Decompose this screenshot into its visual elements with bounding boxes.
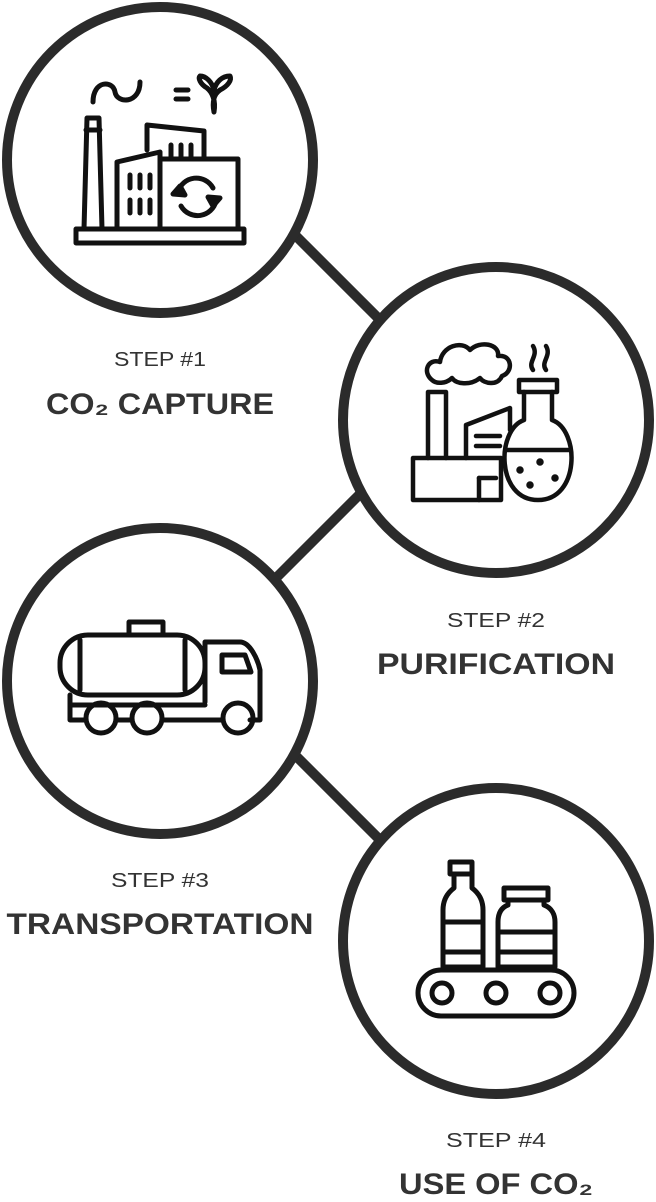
icon: purification bbox=[413, 344, 572, 500]
icon: factory capture bbox=[76, 76, 244, 243]
step 4 label: USE OF CO₂ bbox=[399, 1168, 593, 1201]
step 3 label: TRANSPORTATION bbox=[6, 908, 314, 941]
circle 1 bbox=[7, 7, 313, 313]
step 3 label bbox=[6, 870, 314, 941]
step 1 label: STEP #1 bbox=[114, 349, 206, 371]
circle 4 bbox=[343, 788, 649, 1094]
icon: tanker truck bbox=[60, 622, 260, 733]
step 2 label: STEP #2 bbox=[447, 610, 545, 632]
step 2 label bbox=[377, 610, 615, 681]
step 1 label: CO₂ CAPTURE bbox=[46, 388, 274, 421]
step 1 label bbox=[46, 349, 274, 421]
icon: conveyor bottles bbox=[418, 862, 574, 1016]
connector 1-2 bbox=[296, 236, 380, 320]
step 3 label: STEP #3 bbox=[111, 870, 209, 892]
connector 3-4 bbox=[296, 756, 380, 840]
circle 3 bbox=[7, 528, 313, 834]
step 4 label bbox=[399, 1130, 593, 1201]
step 4 label: STEP #4 bbox=[446, 1130, 546, 1152]
step 2 label: PURIFICATION bbox=[377, 648, 615, 681]
connector 2-3 bbox=[276, 494, 360, 578]
circle 2 bbox=[343, 267, 649, 573]
